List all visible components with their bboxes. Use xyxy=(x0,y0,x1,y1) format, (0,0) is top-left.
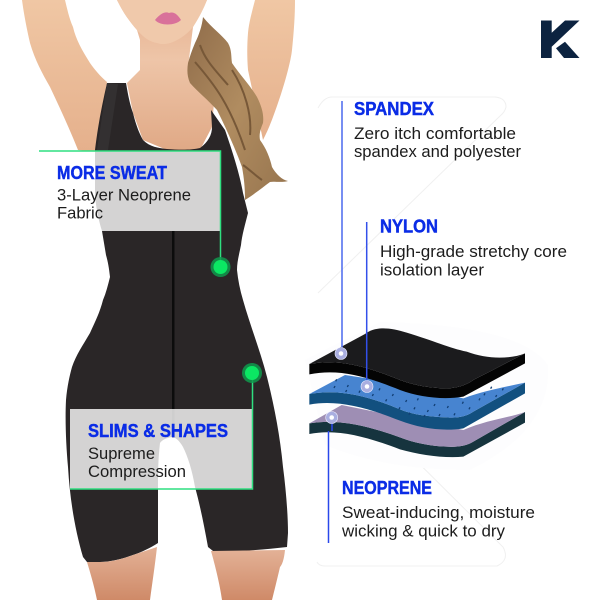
decorative background outlines xyxy=(317,97,506,566)
body shaper suit xyxy=(66,83,288,562)
pointer line xyxy=(328,423,332,543)
heading: NEOPRENE xyxy=(342,478,432,498)
green leader line xyxy=(70,373,252,489)
body: Sweat-inducing, moisture xyxy=(342,504,535,522)
body xyxy=(354,125,522,161)
body: 3-Layer Neoprene xyxy=(57,186,191,204)
centre zip xyxy=(172,231,174,438)
right shin xyxy=(211,550,285,600)
pointer marker xyxy=(335,348,347,360)
body xyxy=(88,445,186,481)
strap highlight xyxy=(97,83,118,150)
hair xyxy=(187,17,288,200)
body xyxy=(57,186,191,222)
translucent panel xyxy=(70,409,252,489)
callout: more sweat xyxy=(39,151,230,277)
spandex label xyxy=(335,99,522,360)
lips xyxy=(155,12,181,24)
green leader line xyxy=(39,151,220,267)
body: Compression xyxy=(88,463,186,481)
pale backdrop behind layers xyxy=(305,322,548,470)
left arm xyxy=(22,0,107,152)
pointer marker xyxy=(326,412,338,424)
left shin xyxy=(87,547,157,600)
hair strands xyxy=(195,45,262,180)
fabric layers illustration xyxy=(309,328,525,457)
face xyxy=(117,0,207,44)
body xyxy=(341,504,535,540)
body: Supreme xyxy=(88,445,155,463)
translucent panel xyxy=(39,151,220,231)
nylon label xyxy=(361,217,567,392)
pointer line xyxy=(366,222,368,381)
heading: MORE SWEAT xyxy=(57,163,167,183)
nylon layer xyxy=(309,375,525,430)
body: Fabric xyxy=(57,204,103,222)
body: Zero itch comfortable xyxy=(354,125,516,143)
neoprene layer xyxy=(309,405,525,457)
callout: slims and shapes xyxy=(70,363,262,489)
body: High-grade stretchy core xyxy=(380,243,567,261)
heading: NYLON xyxy=(380,217,438,237)
model figure xyxy=(22,0,295,600)
spandex layer xyxy=(309,328,525,398)
pointer line xyxy=(341,101,343,348)
body: spandex and polyester xyxy=(354,143,522,161)
body: isolation layer xyxy=(380,262,485,280)
heading: SLIMS & SHAPES xyxy=(88,421,228,441)
body xyxy=(380,243,567,280)
neck and chest xyxy=(117,0,215,150)
body: wicking & quick to dry xyxy=(341,522,506,540)
heading: SPANDEX xyxy=(354,99,434,119)
green marker xyxy=(242,363,262,383)
neoprene label xyxy=(326,412,535,543)
pointer marker xyxy=(361,380,373,392)
right arm xyxy=(247,0,295,140)
green marker xyxy=(210,257,230,277)
logo xyxy=(541,20,580,58)
